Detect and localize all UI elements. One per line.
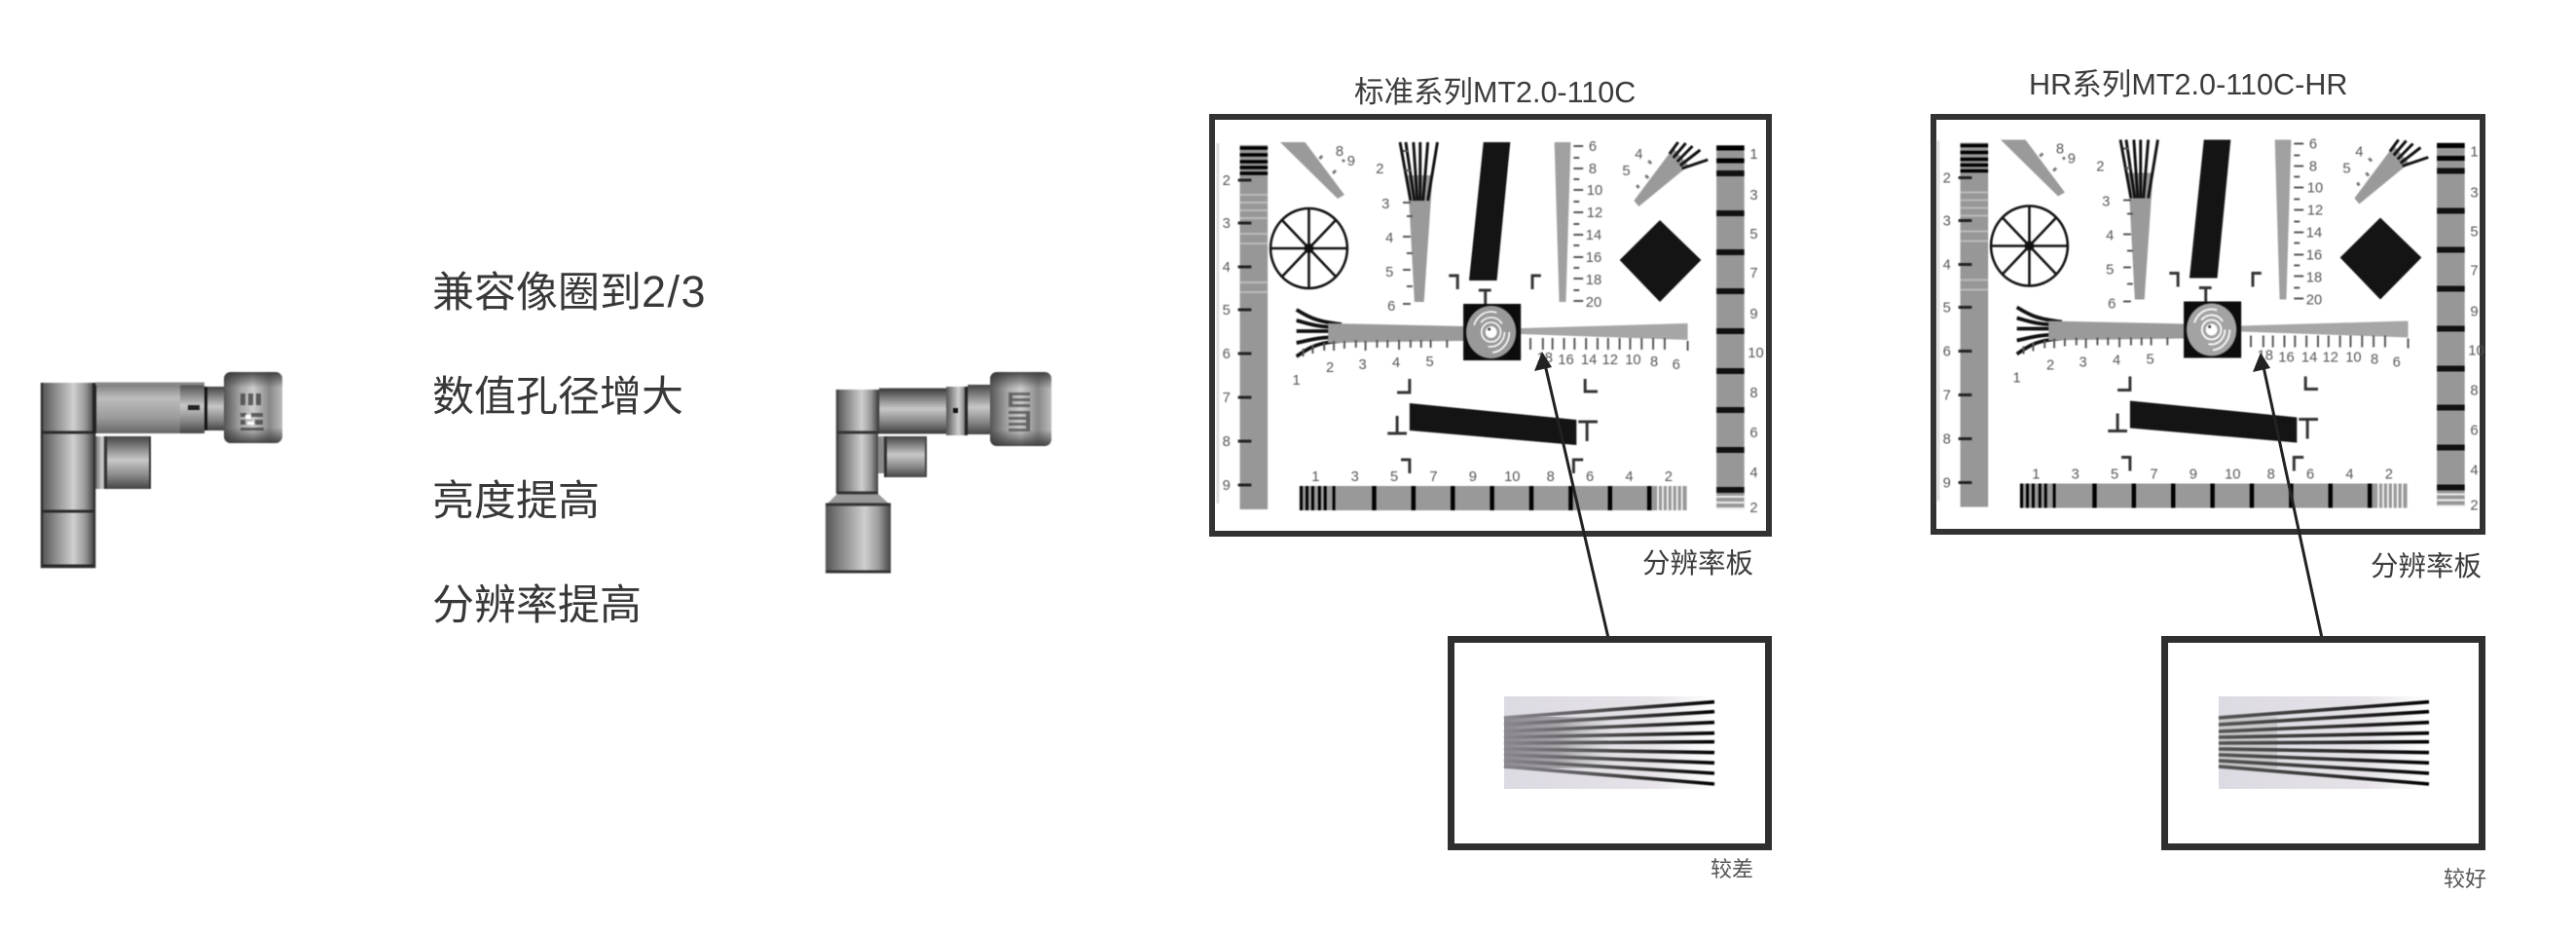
resolution chart: standard series: 4: [1635, 147, 1642, 163]
resolution chart: standard series: 10: [1748, 346, 1764, 361]
resolution chart: HR series: 2: [2096, 159, 2104, 175]
resolution chart: standard series: 12: [1602, 353, 1618, 368]
resolution chart: standard series: 10: [1504, 469, 1521, 485]
resolution chart: HR series: 3: [2079, 355, 2087, 371]
resolution chart: HR series: 9: [1943, 475, 1951, 492]
resolution chart: HR series: 10: [2307, 180, 2323, 197]
label: resolution chart: 分辨率板: [2371, 551, 2482, 582]
resolution chart: standard series: 20: [1586, 295, 1601, 311]
resolution chart: standard series: 5: [1385, 265, 1393, 280]
resolution chart: HR series: 20: [2306, 292, 2322, 309]
resolution chart: standard series: 14: [1581, 353, 1597, 368]
resolution chart: standard series: 10: [1587, 183, 1602, 199]
feature list text: 亮度提高: [432, 478, 600, 525]
resolution chart: standard series: 6: [1387, 299, 1395, 315]
resolution chart: standard series: 12: [1587, 205, 1602, 221]
resolution chart: HR series: 3: [1943, 213, 1951, 230]
resolution chart: standard series: 1: [1293, 373, 1301, 389]
resolution chart: HR series: 4: [2355, 144, 2363, 161]
resolution chart: standard series: 8: [1336, 144, 1343, 160]
resolution chart: standard series: 7: [1223, 391, 1231, 406]
resolution chart: HR series: 6: [2393, 355, 2401, 371]
feature list text: 数值孔径增大: [432, 374, 683, 421]
resolution chart: HR series: 8: [2309, 159, 2317, 175]
resolution chart: HR series: [1933, 117, 2484, 532]
label: resolution chart: 分辨率板: [1642, 548, 1753, 579]
resolution chart: standard series: 18: [1586, 273, 1601, 288]
feature list text: [432, 267, 707, 629]
resolution chart: standard series: 5: [1425, 355, 1434, 370]
resolution chart: standard series: 2: [1376, 162, 1383, 177]
resolution chart: standard series: 18: [1537, 351, 1553, 366]
resolution chart: standard series: 2: [1665, 469, 1673, 485]
resolution chart: HR series: 8: [1943, 431, 1951, 448]
resolution chart: standard series: 8: [1650, 355, 1658, 370]
arrow: standard chart to detail box: [1534, 352, 1608, 638]
resolution chart: standard series: 6: [1673, 357, 1680, 373]
panel: standard series comparison: [1212, 76, 1769, 881]
resolution chart: standard series: 6: [1223, 347, 1231, 362]
resolution chart: HR series: 7: [2150, 467, 2158, 483]
resolution chart: standard series: 1: [1749, 147, 1758, 163]
resolution chart: HR series: 9: [2470, 304, 2479, 320]
resolution chart: HR series: 16: [2278, 350, 2295, 366]
resolution chart: HR series: 9: [2190, 467, 2197, 483]
resolution chart: standard series: 9: [1469, 469, 1477, 485]
resolution chart: standard series: 6: [1586, 469, 1594, 485]
resolution chart: HR series: 2: [2046, 357, 2054, 374]
resolution chart: standard series: 2: [1749, 501, 1758, 516]
caption: worse: 较差: [1711, 857, 1753, 881]
resolution chart: standard series: 5: [1622, 164, 1631, 179]
resolution chart: HR series: 5: [2342, 161, 2351, 177]
resolution chart: HR series: 1: [2470, 144, 2479, 161]
resolution chart: standard series: 3: [1223, 216, 1231, 232]
resolution chart: standard series: 7: [1749, 266, 1758, 281]
resolution chart: HR series: 2: [1943, 170, 1951, 187]
resolution chart: standard series: 8: [1547, 469, 1555, 485]
resolution chart: HR series: 8: [2470, 383, 2479, 399]
resolution chart: HR series: 16: [2306, 247, 2322, 264]
resolution chart: standard series: 16: [1558, 353, 1574, 368]
resolution chart: standard series: 1: [1311, 469, 1319, 485]
resolution chart: HR series: 10: [2225, 467, 2241, 483]
feature list text: 兼容像圈到2/3: [432, 267, 707, 317]
resolution chart: standard series: 6: [1589, 139, 1597, 155]
resolution chart: HR series: 5: [2470, 224, 2479, 241]
resolution chart: HR series: 9: [2068, 151, 2076, 168]
resolution chart: HR series: 14: [2301, 350, 2317, 366]
resolution chart: standard series: 5: [1390, 469, 1398, 485]
resolution chart: standard series: 9: [1749, 307, 1758, 322]
resolution chart: HR series: 7: [2470, 263, 2479, 280]
resolution chart: HR series: 3: [2102, 194, 2110, 210]
resolution chart: HR series: 6: [2470, 423, 2479, 439]
resolution chart: HR series: 7: [1943, 388, 1951, 404]
resolution chart: standard series: 4: [1625, 469, 1634, 485]
resolution chart: HR series: 12: [2307, 203, 2323, 219]
resolution chart: HR series: 6: [2306, 467, 2314, 483]
resolution chart: HR series: 6: [1943, 344, 1951, 360]
resolution chart: standard series: 4: [1223, 260, 1231, 276]
resolution chart: standard series: 4: [1392, 355, 1400, 371]
resolution chart: standard series: 5: [1749, 227, 1758, 243]
resolution chart: HR series: 8: [2371, 352, 2378, 368]
resolution chart: HR series: 4: [2470, 463, 2479, 479]
resolution chart: standard series: 5: [1223, 303, 1231, 318]
heading: standard series: 标准系列MT2.0-110C: [1354, 76, 1636, 109]
resolution chart: HR series: 5: [1943, 300, 1951, 317]
resolution chart: standard series: 8: [1223, 434, 1231, 450]
resolution chart: standard series: 3: [1381, 197, 1389, 212]
resolution chart: HR series: 2: [2385, 467, 2393, 483]
heading: HR series: HR系列MT2.0-110C-HR: [2029, 68, 2348, 101]
resolution chart: standard series: 2: [1223, 173, 1231, 189]
panel: HR series comparison: [1933, 68, 2486, 891]
resolution chart: HR series: 18: [2258, 348, 2273, 364]
resolution chart: standard series: [1212, 117, 1769, 534]
resolution chart: HR series: 4: [2345, 467, 2354, 483]
resolution chart: standard series: 8: [1749, 386, 1758, 401]
resolution chart: HR series: 4: [2106, 228, 2114, 244]
resolution chart: standard series: 14: [1586, 228, 1601, 243]
icon: standard series lens: [42, 372, 282, 567]
resolution chart: HR series: 4: [2113, 353, 2120, 369]
resolution chart: standard series: 3: [1359, 357, 1367, 373]
resolution chart: HR series: 5: [2111, 467, 2118, 483]
resolution chart: HR series: 6: [2309, 136, 2317, 153]
resolution chart: standard series: 3: [1351, 469, 1359, 485]
resolution chart: HR series: 4: [1943, 257, 1951, 274]
resolution chart: standard series: 4: [1749, 466, 1758, 481]
resolution chart: standard series: 6: [1749, 426, 1758, 441]
resolution chart: HR series: 2: [2470, 498, 2479, 514]
resolution chart: standard series: 10: [1625, 353, 1641, 368]
resolution chart: standard series: 9: [1223, 478, 1231, 494]
resolution chart: HR series: 5: [2106, 262, 2114, 279]
detail box: HR series: [2165, 639, 2483, 847]
resolution chart: HR series: 3: [2470, 185, 2479, 202]
resolution chart: standard series: 3: [1749, 188, 1758, 204]
resolution chart: standard series: 2: [1326, 360, 1334, 376]
resolution chart: HR series: 14: [2306, 225, 2322, 242]
resolution chart: standard series: 4: [1385, 231, 1393, 246]
detail box: standard series: [1451, 639, 1768, 847]
resolution chart: standard series: 16: [1586, 250, 1601, 266]
resolution chart: HR series: 12: [2323, 350, 2338, 366]
resolution chart: HR series: 8: [2056, 141, 2064, 158]
resolution chart: HR series: 1: [2032, 467, 2040, 483]
resolution chart: HR series: 5: [2146, 352, 2154, 368]
resolution chart: HR series: 3: [2072, 467, 2079, 483]
resolution chart: HR series: 6: [2108, 296, 2116, 313]
caption: better: 较好: [2444, 867, 2486, 891]
arrow: HR chart to detail box: [2253, 353, 2322, 638]
resolution chart: HR series: 18: [2306, 270, 2322, 286]
resolution chart: HR series: 10: [2345, 350, 2362, 366]
resolution chart: HR series: 10: [2468, 343, 2484, 359]
icon: HR series lens: [826, 372, 1051, 573]
feature list text: 分辨率提高: [432, 582, 642, 629]
resolution chart: HR series: 8: [2267, 467, 2275, 483]
resolution chart: HR series: 1: [2013, 370, 2021, 387]
resolution chart: standard series: 8: [1589, 162, 1597, 177]
resolution chart: standard series: 9: [1347, 154, 1355, 169]
resolution chart: standard series: 7: [1429, 469, 1438, 485]
